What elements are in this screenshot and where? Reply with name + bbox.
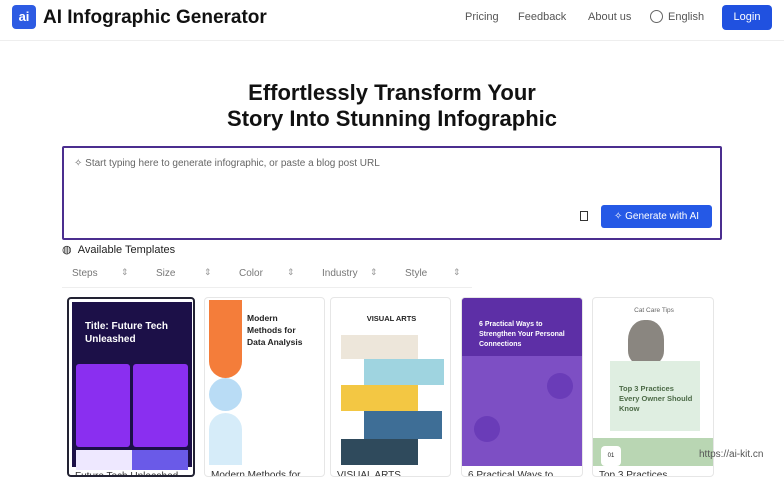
card 5: cat care: 01 [608,453,614,459]
text: Industry [322,268,358,279]
text: Color [239,268,263,279]
icon: file [580,211,588,221]
placeholder: ✧ Start typing here to generate infographic, or paste a blog post URL [74,158,380,169]
icon: cat [628,320,664,364]
card 2: data analysis [204,297,325,477]
icon: logo [12,5,36,29]
card 2: data analysis: Data Analysis [247,337,302,347]
login button [722,5,772,30]
card 5: cat care: Every Owner Should [619,394,692,403]
card 2: data analysis: Modern [247,313,278,323]
header: Feedback [518,11,566,23]
card 5: cat care: Know [619,404,639,413]
card 4: personal connections: 6 Practical Ways to [479,321,543,328]
hero heading [227,80,557,131]
text: ⇕ [204,267,212,277]
card 3: visual arts: VISUAL ARTS [367,314,416,323]
generate button: ✧ Generate with AI [614,211,699,222]
card 4: personal connections: Strengthen Your Personal [479,331,565,338]
nav links: Pricing [465,11,499,23]
input box [62,146,722,240]
available templates heading: ◍ Available Templates [62,244,175,256]
text: Style [405,268,427,279]
card 1: future tech: Unleashed [85,334,136,345]
hero heading: Story Into Stunning Infographic [227,106,557,131]
text: Size [156,268,175,279]
text: ⇕ [121,267,129,277]
card 4: personal connections [461,297,583,477]
card 3: visual arts [330,297,451,477]
icon: globe [650,10,663,23]
card 5: cat care: Top 3 Practices [619,384,674,393]
brand title: AI Infographic Generator [43,7,267,28]
generate button [601,205,712,228]
watermark: https://ai-kit.cn [699,449,763,460]
card 5: cat care [592,297,714,477]
header [0,0,784,41]
card 1: future tech: Title: Future Tech [85,321,168,332]
header: About us [588,11,631,23]
text: Steps [72,268,98,279]
header: English [668,11,704,23]
hero heading: Effortlessly Transform Your [248,80,536,105]
card 5: cat care: Cat Care Tips [634,307,674,314]
text: ⇕ [453,267,461,277]
text: ⇕ [370,267,378,277]
icon: logo: ai [19,9,29,24]
card 2: data analysis: Methods for [247,325,296,335]
filters [62,262,472,288]
login button: Login [734,11,760,23]
card 4: personal connections: Connections [479,341,521,348]
card 1: future tech [67,297,195,477]
text: ⇕ [287,267,295,277]
